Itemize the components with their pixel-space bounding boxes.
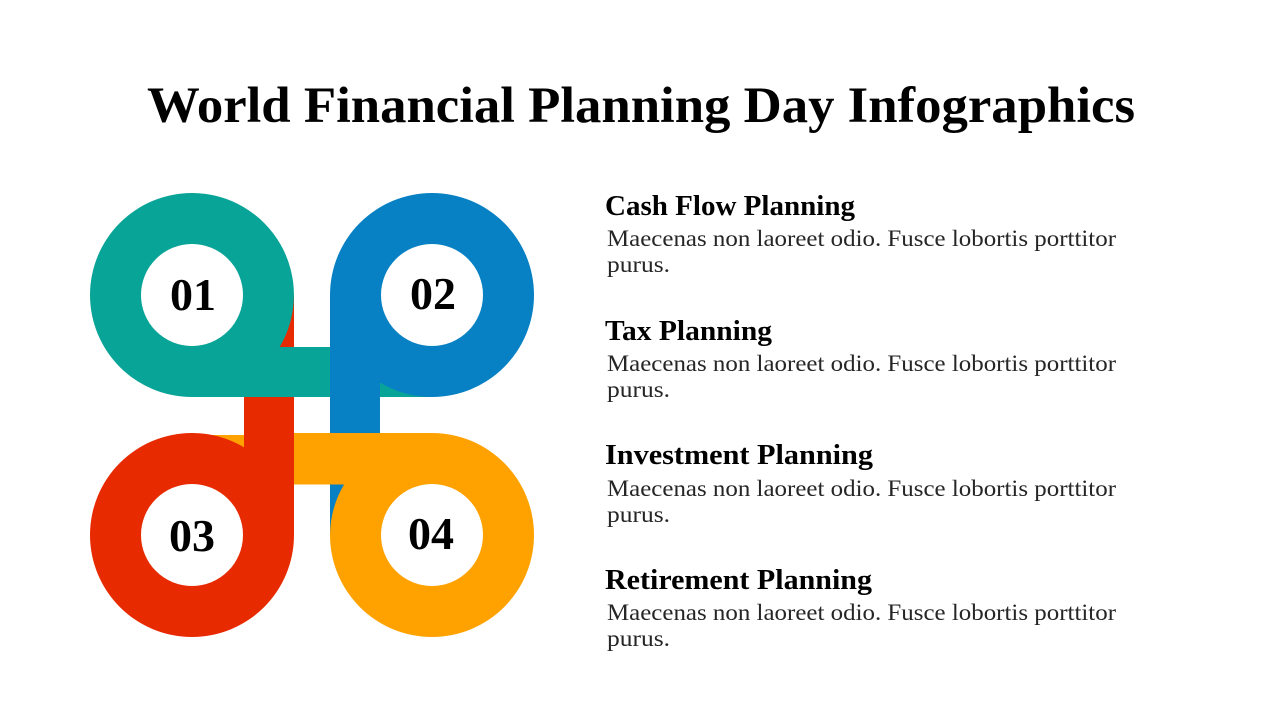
item: cash flow planning: Maecenas non laoreet odio. Fusce lobortis porttitor [607, 226, 1116, 251]
item: investment planning [605, 439, 1116, 527]
title: World Financial Planning Day Infographics [147, 78, 1135, 134]
item: retirement planning [605, 564, 1116, 651]
red loop 03: 03 [169, 510, 215, 561]
orange loop 04 [192, 433, 534, 637]
teal loop 01 [90, 193, 432, 397]
red loop 03 [90, 397, 294, 637]
blue loop 02: 02 [410, 268, 456, 319]
item: retirement planning: Maecenas non laoreet odio. Fusce lobortis porttitor [607, 600, 1116, 625]
item: cash flow planning: purus. [607, 252, 670, 277]
item: tax planning [605, 315, 1116, 402]
orange loop 04: 04 [408, 508, 454, 559]
item: tax planning: Tax Planning [605, 315, 772, 347]
item: tax planning: Maecenas non laoreet odio. Fusce lobortis porttitor [607, 351, 1116, 376]
item: investment planning: purus. [607, 502, 670, 527]
item: cash flow planning: Cash Flow Planning [605, 190, 855, 222]
item: cash flow planning [605, 190, 1116, 277]
item: investment planning: Investment Planning [605, 439, 874, 471]
red loop tail beneath teal [244, 295, 294, 398]
blue loop 02 [330, 193, 534, 535]
item: retirement planning: Retirement Planning [605, 564, 873, 596]
item: investment planning: Maecenas non laoreet odio. Fusce lobortis porttitor [607, 476, 1116, 501]
teal loop 01: 01 [170, 269, 216, 320]
item: tax planning: purus. [607, 377, 670, 402]
item: retirement planning: purus. [607, 626, 670, 651]
